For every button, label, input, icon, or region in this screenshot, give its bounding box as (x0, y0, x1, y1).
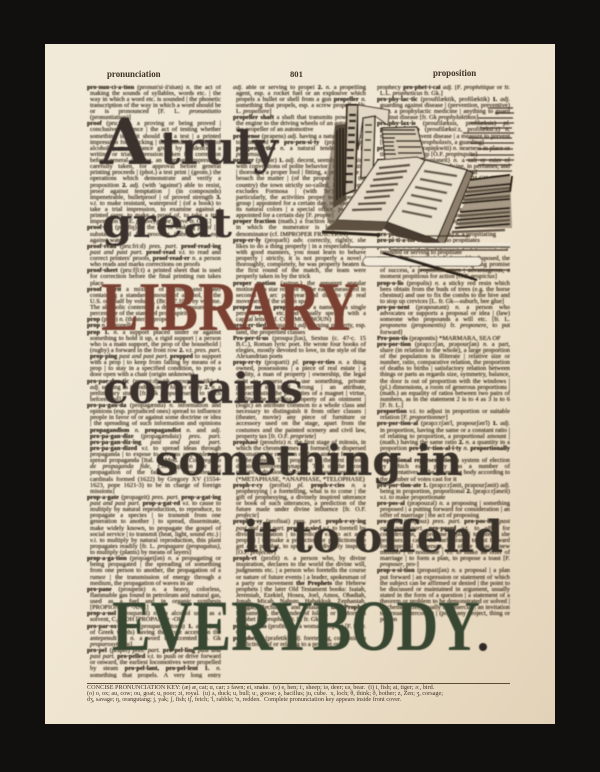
dictionary column 2: prop·er·tied (propərtid) adj. owning property, esp. land, the propertied classes (233, 322, 366, 336)
quote line: LIBRARY: LIBRARY (101, 269, 359, 346)
dictionary column 2: propeller shaft a shaft that transmits power from the engine to the driving wheels of an automobile | the propeller of an automotive (233, 114, 366, 133)
dictionary column 1: pro·pane (proupein) n. a heavy, colorless, flammable gas found in petroleum and natural gas, used as a fuel and in organic synthesis [PROPIONIC+ -ANE] (87, 586, 221, 611)
quote text (99, 105, 503, 666)
pronunciation key: dʒ, savage; ŋ, orangutang; j, yak; ʃ, fish; tʃ, fetch; 'l, rabble; 'n, redden. Complete pronunciation key appears inside front cover. (87, 696, 401, 703)
open book (322, 157, 473, 247)
dictionary column 3: pro·pi·ti·a·to·ry (prəpiʃiətɔːri, prəpiʃiətouri) adj. intended or serving to propitiate (377, 243, 510, 256)
dictionary column 2: Pro·per·ti·us (proupəːʃiəs), Sextus (c. 47-c. 15 B.C.), Roman lyric poet. He wrote four books of elegies, mostly devoted to love, in the style of the Alexandrian poets (233, 335, 366, 360)
paper sheet (45, 44, 555, 724)
page heading: pronunciation: pronunciation (107, 69, 161, 79)
page number: 801 (290, 69, 303, 79)
dictionary column 1: proof spirit a mixture of alcohol and water containing a standard amount of alcohol, in the U.S. one half by volume, (Br.) 57.10% by volume. The alcoholic content of a drink is measured as a percentage of the standard proof spirit (87, 286, 221, 317)
dictionary column 1 (86, 84, 222, 678)
dictionary column 1: prop·a·ga·tion (propəgeiʃən) n. a propagating or being propagated | the spreading of something from one person to another, the propagation of a rumor | the transmission of energy through a medium, the propagation of waves in air (87, 555, 221, 587)
dictionary column 3: proportion v.t. to adjust in proportion or suitable relation [F. proportionner] (377, 408, 510, 421)
quote line: something in: something in (155, 436, 462, 485)
dictionary column 1: pro·nun·ci·a·tion (pronun'si·ā'shən) n. the act of making the sounds of syllables, words etc. | the way in which a word etc. is sounded | the phonetic transcription of the way in which a word should be or is pronounced [F. L. pronuntiatio (pronuntiation)] (87, 84, 221, 121)
stacked books (452, 175, 512, 232)
dictionary column 2: prophasé (proufeiz) n. the first stage of mitosis, in which the chromosomes are formed, the dispersed chromatin, the rejection of these and the formation of the spindle. The prophase of the first meiotic division involves synapsis. That of the second meiotic division occurs without replication (*METAPHASE, *ANAPHASE, *TELOPHASE) (233, 439, 366, 482)
dictionary column 2: prop·er·ty (propərti) pl. prop·er·ties n. a thing owned, possessions | a piece of real estate | a quality, a man of property | ownership, the legal right to possess and use something, private property in itself wrong | an attribute, characteristic, the properties of a magnet | virtue, quality, the soothing property of an ointment | (logic) an attribute common to a whole class and necessary to distinguish it from other classes | (theater, movie) any piece of furniture or accessory used on the stage, apart from the costumes and the painted scenery and civil law, property tax [fr. O.F. propriete] (233, 359, 366, 440)
dictionary column 2: pro·phet·ic (prəfetik) adj. foretelling, containing a prediction | of or relating to a prophet or (233, 635, 366, 648)
dictionary column 2: proph·et·ess (profitis) n. a woman prophet [F. L. fr. Gk] (233, 622, 366, 636)
dictionary column 3: pro·po·nent (prəpounənt) n. a person who advocates or supports a proposal or idea | (law) someone who propounds a will etc. [fr. L. proponens (proponentis) fr. proponere, to put forward] (377, 304, 510, 336)
dictionary column 3: pro·pose (prəpouz) pres. part. pro·pos·ing past and past part. pro·posed v.t. to offer for consideration, to propose a plan | to intend, she proposes to catch the early train | to put forward for approval in person, for office or as a new member | to nominate | v.i. to make an offer of marriage | to form a plan, to propose a toast [F. proposer, pro-] (377, 518, 510, 568)
dictionary column 3: pro·pi·o·nate (proupiəneit) n. a salt or ester of propionic acid, used in medicine, in perfumes, and as a mold inhibitor in foods and bread (377, 157, 510, 176)
quote full stop (479, 643, 487, 651)
dictionary column 1: pro·pa·gan·da (propəgændə) n. information and opinions (esp. prejudiced ones) spread to influence people in favor of or against some doctrine or idea | the spreading of such information and opinions propagandism n. propagandist n. and adj. pro·pa·gan·dize (propəgændaiz) pres. part. pro·pa·gan·diz·ing past and past part. pro·pa·gan·dized v.t. to spread ideas through propaganda | to expose to persons or peoples | to spread propaganda [Ital. fr. Mod. L. Congregatio de propaganda fide, Congregation for the propagation of the faith, the committee of cardinals formed (1622) by Gregory XV (1554-1623, pope 1621-3) to be in charge of foreign missions] (87, 402, 221, 495)
quote line: great: great (102, 200, 233, 247)
dictionary column 3: pro·pi·ti·a·tion (prəpiʃieiʃən) n. a propitiating (377, 230, 496, 238)
dictionary column 3: Pro·pon·tis (prəpontis) *MARMARA, SEA OF (377, 335, 501, 342)
quote line: contains: contains (103, 364, 303, 413)
quote line: A truly: A (99, 105, 151, 180)
dictionary column 1: prop·a·nol (proupənol) n. an alcohol used as a solvent, C₃H₇OH [PROPANE+ -OL] (87, 610, 221, 623)
dictionary column 2: proph·e·cy (profisi) pl. proph·e·cies n. a prophesying | a foretelling, what is to come | the gift of prophesying, a divinely inspired utterance or book of such utterances, a prediction of the future made under divine influence [fr. O.F. profecie] (233, 482, 366, 519)
dictionary column 2: proph·et (profit) n. a person who, by divine inspiration, declares to the world the divine will, judgments etc. | a person who foretells the course or nature of future events | a leader, spokesman of a party or movement the Prophets the Hebrew prophets | the later Old Testament books: Isaiah, Jeremiah, Ezekiel, Hosea, Joel, Amos, Obadiah, Jonah, Micah, Nahum, Habakkuk, Zephaniah, Haggai, Zechariah and Malachi the Prophet Mohammed, the founder of Islam, or a Mormon prophet [F. prophète fr. L. fr. Gk] (233, 555, 366, 623)
dictionary column 1: proof·read (pruːfriːd) pres. part. proof·read·ing past and past part. proof·read v.t. to read and correct printers' proofs, proof·read·er n. a person who reads and marks corrections on proofs (87, 243, 221, 268)
dictionary column 2 (232, 84, 367, 648)
dictionary column 1: prop n. a propeller (87, 322, 136, 329)
dictionary column 3: prop·o·si·tion (propəziʃən) n. a proposal | a plan put forward | an expression or statement of which the subject can be affirmed or denied | the point to be discussed or maintained in argument, usually stated in the form of a question | a statement of a theorem or problem to be demonstrated or solved | a scheme, offer, usually commercial | an invitation to sexual intercourse | (pop.) any project, thing or person (377, 567, 510, 623)
dictionary column 2: prop·er·ly (propərli) adv. correctly, rightly, she likes to do a thing properly | in a respectable way, with good manners, you must learn to behave properly | strictly, it is not properly a novel | thoroughly, completely, he was properly beaten in the first round of the match, the team were properly taken in by the trick (233, 237, 366, 280)
quote line: it to offend: it to offend (243, 512, 503, 563)
dictionary column 3: pro·pi·tious (prəpiʃəs) adj. favorably disposed, the fates were propitious | favorable, giving promise of success, a propitious omen | advantageous, a moment propitious for action [O.F. propicius] (377, 255, 510, 280)
pronunciation key (87, 683, 510, 705)
quote line: EVERYBODY: EVERYBODY (112, 586, 480, 666)
dictionary column 1: proof·ing (pruːfiŋ) n. the act of making proof | a substance used for proofing (fabric etc., esp. against water (87, 224, 221, 244)
page heading: proposition: proposition (433, 68, 476, 78)
strip and pencil below the books (350, 236, 510, 280)
dictionary column 3: prop·o·lis (propəlis) n. a sticky red resin which bees obtain from the buds of trees (e.g. the horse chestnut) and use to fix the combs to the hive and to stop up crevices [L. fr. Gk—suburb, bee glue] (377, 280, 510, 305)
dictionary column 3: pro·phy·lax·is (proufilæksis, profilæksis) pl. pro·phy·lax·es (proufilæksiːz, profilæksiːz) n. treatment to prevent disease | a measure to prevent [Mod. L. fr. Gk prophulaxis, a guarding] (377, 120, 510, 146)
dictionary column 2: prop·er (propər) 1. adj. decent, seemly, in keeping with conventions of polite behavior | real, genuine | thorough, a proper fool | fitting, a proper time to broach the matter | (of the proper areas of the country) the town strictly so-called, Japan proper excludes Formosa | (with 'to') belonging particularly, the activities proper to a specified group | appointed for a certain day, represented in its natural colors | a special office, psalm etc. appointed for a certain day [F. propre] (233, 157, 366, 219)
dictionary column 2: proper motion (astron.) the apparent angular motion of a star relative to the earth, measured in seconds of arc per year and due to the real movement of the star in space (233, 280, 366, 305)
smudged text behind illustration (463, 108, 514, 171)
pronunciation key: CONCISE PRONUNCIATION KEY: (æ) æ, cat; ɑ, car; ɔ fawn; ei, snake. (e) e, hen; iː, sheep; iə, deer; εə, bear. (i) i, fish; ai, tiger; əː, bird. (87, 684, 434, 691)
dictionary column 3: pro·phy·lac·tic (proufilæktik, profilæktik) 1. adj. guarding against disease | (prevention, preventive) 2. n. a prophylactic medicine | anything to guard against disease [fr. Gk prophylaktikos] (377, 96, 510, 121)
dictionary column 3 (376, 84, 511, 624)
dictionary column 2: proper noun, proper name a name of a single person, place etc. and usually spelled with a capital letter (cf. COMMON NOUN) (233, 304, 366, 323)
dictionary column 2: proph·e·sy (profisai) pres. part. proph·e·sy·ing past and past part. proph·e·sied v.t. to foretell by divine inspiration | to predict | v.i. to act as a prophet | to make a prediction or predictions, to get as a prophet, to speak as if divinely inspired [O.F. profecier] (233, 518, 366, 556)
dictionary column 1: pro·pae·deu·tic (proupi:djuːtik, proupi:djuːtik) 1. adj. serving as introduction to higher study 2. n. a preliminary study [fr. Gk propaideuein, to teach beforehand] (87, 378, 221, 403)
upright books (322, 105, 425, 232)
dictionary column 1: proof (pruːf) n. a proving or being proved | conclusive evidence | the act of testing whether something is as it should be, a test | a printed impression for checking | the standard strength of alcohol | an assurance given by evidence | a writing or trial impression taken for correction before general printing, an approved impression, carefully taken, for approval before general printing proceeds | (phot.) a test print | (geom.) the operations which demonstrate and verify a proposition 2. adj. (with 'against') able to resist, proof against temptation | (in compounds) impenetrable, bulletproof | of proved strength 3. v.t. to make resistant, waterproof | (of a book) to take a trial impression, to examine against a printed copy, to make a proof of, to take a trial impression [M.E. preove, prove, preve fr. O. F.] (87, 120, 221, 225)
dictionary column 2: pro·pense (prəpens) adj. having a natural tendency to, inclined to pro·pen·si·ty (prəpensiti) pl. pro·pen·si·ties n. a natural tendency [fr. L. propensus] (233, 132, 366, 158)
dictionary column 3: pro·pos·al (prəpouzəl) n. a proposing | something proposed | a putting forward for consideration | an offer of marriage | the act of proposing (377, 500, 510, 519)
dictionary column 1: proof·sheet (pruːfʃiːt) a printed sheet that is used for correction before the final printing run takes place (87, 267, 221, 286)
dictionary column 3: pro·por·tion (prəpɔːrʃən, prəpourʃən) n. a part, share (in relation to the whole), a large proportion of the population is illiterate | relative size or number, ratio, comparative relation, the proportion of deaths to births | satisfactory relation between things or parts as regards size, symmetry, balance, the door is out of proportion with the windows | (pl.) dimensions, a room of generous proportions | (math.) an equality of ratios between two pairs of numbers, as in the statement 2 is to 4 as 3 is to 6 [F. fr. L.] (377, 341, 510, 409)
dictionary column 2: proper fraction (math.) a fraction less than unity in which the numerator is less than the denominator (cf. IMPROPER FRACTION) (233, 218, 366, 238)
quote line: A truly: truly (160, 121, 279, 175)
dictionary column 3: pro·pin·qui·ty (prəpiŋkwiti) n. nearness in place or time | close kinship [O.F. propinquite] (377, 145, 510, 158)
dictionary column 1: prop·a·gate (propəgeit) pres. part. prop·a·gat·ing past and past part. prop·a·gat·ed v.t. to cause to multiply by natural reproduction, to reproduce, to propagate a species | to transmit from one generation to another | to spread, disseminate, make widely known, to propagate the gospel of social service | to transmit (heat, light, sound etc.) | v.i. to multiply by natural reproduction, this plant propagates readily [fr. L. propagare (propagatus), to multiply (plants) by means of layers] (87, 494, 221, 556)
dictionary column 1: prop (prop) n. (theater) a property (87, 316, 175, 323)
dictionary column 1: prop 1. n. a support placed under or against something to hold it up, a rigid support | a person who is a main support, the prop of the household | (rugby) a forward in the front row 2. v.t. pres. part. prop·ping past and past part. propped to support with a prop | to keep from falling by means of a prop | to stay in a specified condition, to prop a door open with a chair (origin unknown) (87, 328, 221, 378)
dictionary column 3: pro·por·tion·ate 1. (prəpɔːrʃənit, prəpourʃənit) adj. being in proportion, proportional 2. (prəpɔːrʃəneit) v.t. to make proportionate (377, 482, 510, 501)
dictionary column 1: pro·par·ox·y·tone (prouparɔksitoun) 1. adj. (esp. of Greek words) having the acute accent on the antepenult 2. n. a word so accented [fr. Gk proparoxytonos] (87, 622, 221, 648)
dictionary column 3: pro·pi·ti·a·tor a person who propitiates (377, 237, 480, 244)
quote line: A truly (99, 105, 279, 180)
dictionary column 3: pro·pi·on·ic acid a fatty acid, CH₃CH₂COOH, obtained by fermentation, found in dairy products, used in flavorings, perfumes and in the manufacture of plastics, herbicides, and fungicides pro·pi·ti·ate (prəpiʃieit) pres. part. pro·pi·ti·at·ing past and past part. pro·pi·ti·at·ed v.t. to appease, make favorably inclined, to win over, to conciliate, to regain the favor of [fr. L. propitiare] (377, 175, 510, 231)
pronunciation key: (o) o, ox; au, cow; ou, goat; u, poor; ɔi, royal. (u) ʌ, duck; u, bull; uː, goose; ə, bacillus; ju, cube. x, loch; θ, think; ð, bother; z, Zen; ʒ, corsage; (87, 690, 443, 697)
illustration: stack of books (322, 105, 514, 280)
dictionary column 3: pro·por·tion·al (prəpɔːrʃən'l, prəpourʃən'l) 1. adj. in proportion, having the same or a constant ratio | of relating to proportion, a proportional amount | (math.) having the same ratio 2. n. a quantity in a proportion pro·por·tion·al·i·ty n. proportionally adv. (377, 420, 510, 458)
dictionary column 3: proportional representation a system of election by which each party has a number of representatives in the governing body according to the number of votes cast for it (377, 457, 510, 482)
